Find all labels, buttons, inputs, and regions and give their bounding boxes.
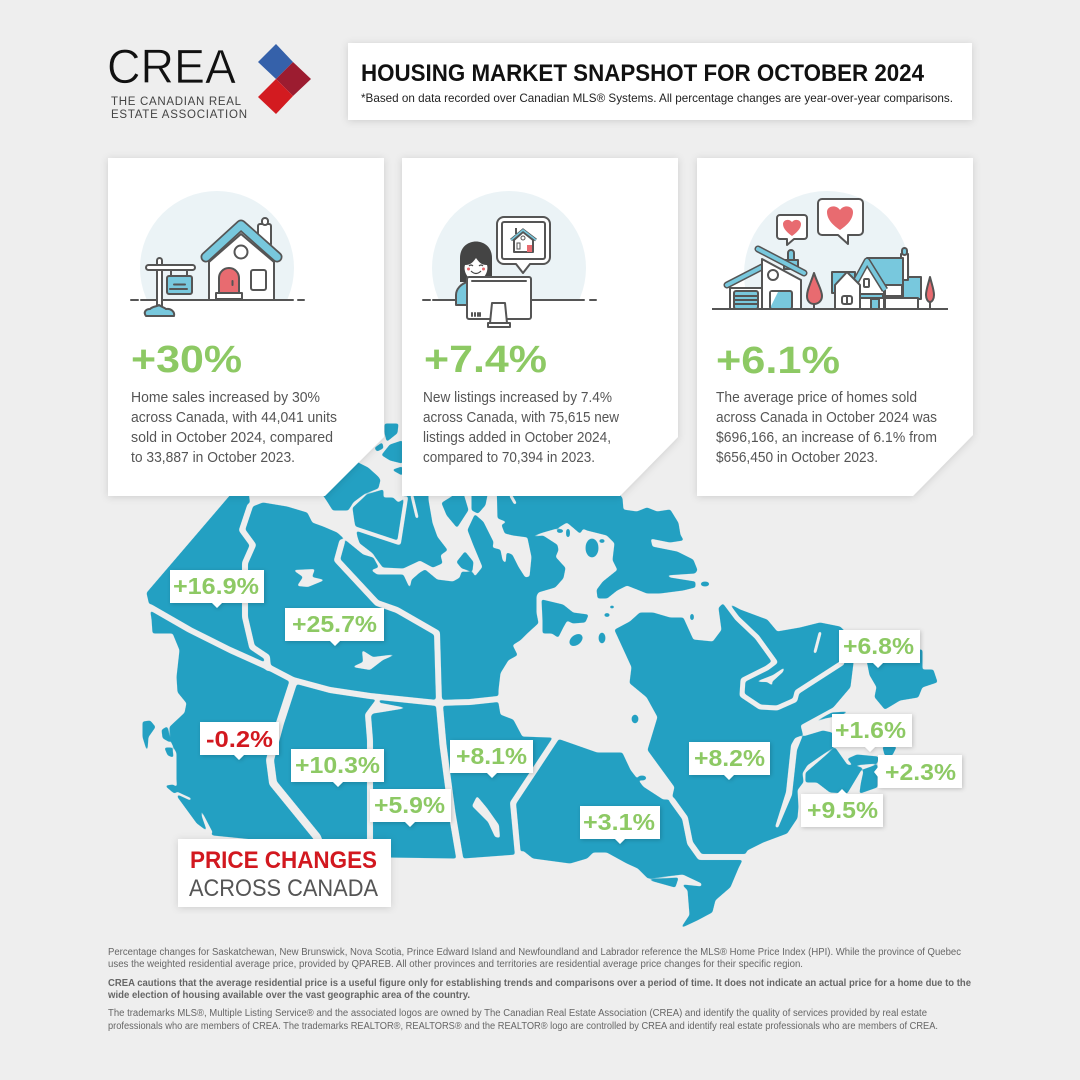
label: Prince Edward Island +1.6%: +1.6% bbox=[835, 717, 906, 743]
heading: price changes across Canada: ACROSS CANADA bbox=[189, 875, 378, 902]
label: New Brunswick +9.5%: +9.5% bbox=[807, 797, 878, 823]
label: Manitoba +8.1% bbox=[450, 740, 533, 778]
footnote: caution bbox=[107, 978, 971, 1001]
statistic: +30%: +30% bbox=[131, 339, 242, 381]
label: British Columbia -0.2% bbox=[200, 722, 279, 760]
text: home sales description: sold in October 2024, compared bbox=[131, 429, 333, 446]
label: Yukon +16.9%: +16.9% bbox=[173, 573, 259, 599]
label: Quebec +8.2%: +8.2% bbox=[694, 745, 765, 771]
label: Prince Edward Island +1.6% bbox=[832, 714, 912, 752]
label: Newfoundland and Labrador +6.8% bbox=[839, 630, 920, 668]
title panel: HOUSING MARKET SNAPSHOT FOR OCTOBER 2024 bbox=[361, 60, 925, 87]
text: home sales description: Home sales increased by 30% bbox=[131, 389, 320, 406]
text: home sales description: to 33,887 in October 2023. bbox=[131, 449, 295, 466]
statistic: +6.1%: +6.1% bbox=[716, 340, 840, 382]
footnote: caution: wide election of housing available over the vast geographic area of the country. bbox=[107, 990, 470, 1001]
text: average price description bbox=[716, 389, 937, 466]
panel: average price bbox=[697, 158, 973, 496]
label: Manitoba +8.1%: +8.1% bbox=[456, 743, 527, 769]
heading: price changes across Canada: PRICE CHANGES bbox=[190, 847, 377, 874]
text: average price description: The average price of homes sold bbox=[716, 389, 917, 406]
text: new listings description: across Canada, with 75,615 new bbox=[423, 409, 619, 426]
text: new listings description: New listings increased by 7.4% bbox=[423, 389, 612, 406]
panel: new listings bbox=[402, 158, 678, 496]
label: Newfoundland and Labrador +6.8%: +6.8% bbox=[843, 633, 914, 659]
statistic: +7.4%: +7.4% bbox=[424, 339, 547, 381]
footnote: methodology: uses the weighted residential average price, provided by QPAREB. All other provinces and territories are residential average price changes for their specific region. bbox=[108, 959, 803, 970]
footnote: trademarks bbox=[108, 1008, 938, 1032]
text: new listings description bbox=[423, 389, 619, 466]
icon: woman at computer bbox=[422, 191, 597, 328]
label: Nova Scotia +2.3% bbox=[874, 755, 962, 788]
text: average price description: $696,166, an increase of 6.1% from bbox=[716, 429, 937, 446]
label: New Brunswick +9.5% bbox=[801, 789, 883, 827]
label: Saskatchewan +5.9% bbox=[370, 789, 451, 827]
map of Canada bbox=[138, 418, 942, 932]
logo: CREA: CREA bbox=[107, 41, 236, 94]
text: new listings description: listings added in October 2024, bbox=[423, 429, 611, 446]
text: average price description: across Canada in October 2024 was bbox=[716, 409, 937, 426]
title panel bbox=[348, 43, 972, 120]
text: home sales description: across Canada, with 44,041 units bbox=[131, 409, 337, 426]
logo: CREA bbox=[107, 41, 311, 121]
footnote: trademarks: professionals who are members of CREA. The trademarks REALTOR®, REALTORS® and the REALTOR® logo are controlled by CREA and identify real estate professionals who are members of CREA. bbox=[108, 1021, 938, 1032]
icon: houses with hearts bbox=[712, 191, 948, 310]
text: average price description: $656,450 in October 2023. bbox=[716, 449, 878, 466]
footnote: trademarks: The trademarks MLS®, Multiple Listing Service® and the associated logos are owned by The Canadian Real Estate Association (CREA) and identify the quality of services provided by real estate bbox=[108, 1008, 927, 1019]
label: Ontario +3.1% bbox=[580, 806, 660, 844]
text: home sales description bbox=[131, 389, 337, 466]
text: new listings description: compared to 70,394 in 2023. bbox=[423, 449, 595, 466]
label: Northwest Territories +25.7%: +25.7% bbox=[292, 611, 377, 637]
label: Ontario +3.1%: +3.1% bbox=[583, 809, 655, 835]
label: Saskatchewan +5.9%: +5.9% bbox=[374, 792, 445, 818]
title panel: *Based on data recorded over Canadian MLS® Systems. All percentage changes are year-over-year comparisons. bbox=[361, 91, 953, 105]
label: Yukon +16.9% bbox=[170, 570, 264, 608]
label: Nova Scotia +2.3%: +2.3% bbox=[885, 759, 956, 785]
footnote: methodology bbox=[108, 947, 961, 970]
panel: home sales bbox=[108, 158, 384, 496]
logo: CREA: THE CANADIAN REAL bbox=[111, 96, 242, 108]
label: Alberta +10.3%: +10.3% bbox=[295, 752, 380, 778]
footnote: methodology: Percentage changes for Saskatchewan, New Brunswick, Nova Scotia, Prince Edward Island and Newfoundland and Labrador reference the MLS® Home Price Index (HPI). While the province of Quebec bbox=[108, 947, 961, 958]
heading: price changes across Canada bbox=[178, 839, 391, 907]
label: Quebec +8.2% bbox=[689, 742, 770, 780]
icon: house with for-sale sign bbox=[130, 191, 305, 317]
footnote: caution: CREA cautions that the average residential price is a useful figure only for establishing trends and comparisons over a period of time. It does not indicate an actual price for a home due to the bbox=[108, 978, 971, 989]
label: Northwest Territories +25.7% bbox=[285, 608, 384, 646]
logo: CREA: ESTATE ASSOCIATION bbox=[111, 109, 247, 121]
label: British Columbia -0.2%: -0.2% bbox=[206, 726, 273, 752]
label: Alberta +10.3% bbox=[291, 749, 384, 787]
